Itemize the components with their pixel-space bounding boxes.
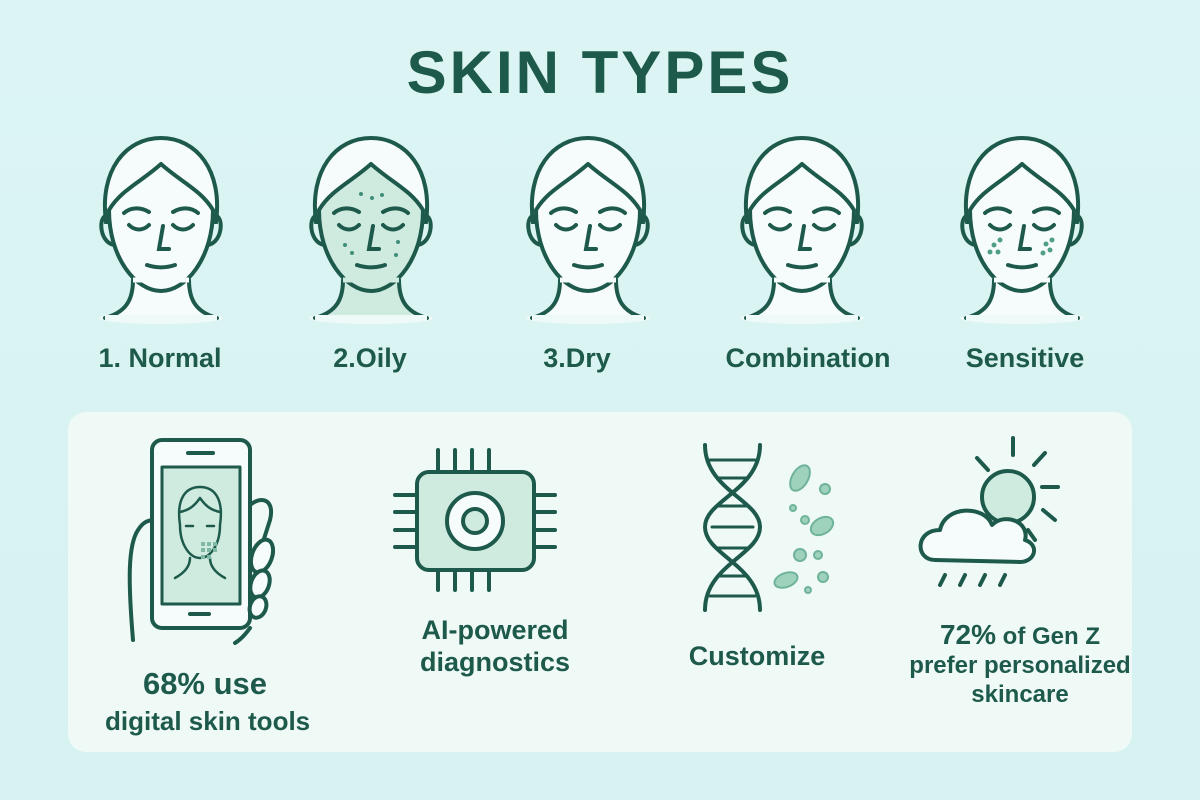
text: 68% stat: 68% use xyxy=(143,666,267,701)
text: 72% stat: skincare xyxy=(971,681,1069,708)
text: customize: Customize xyxy=(689,641,825,671)
text: 72% stat: 72% of Gen Z xyxy=(940,619,1100,650)
face: sensitive xyxy=(960,138,1084,324)
panel: bottom facts xyxy=(68,412,1132,752)
icon: AI chip xyxy=(395,450,555,590)
icon: sun and cloud xyxy=(921,438,1058,585)
text: Combination xyxy=(726,343,890,373)
text: 72% stat xyxy=(909,619,1131,708)
text: Sensitive xyxy=(966,343,1084,373)
text: AI diagnostics: diagnostics xyxy=(420,647,570,677)
faces row xyxy=(99,136,1084,324)
text: 68% stat: digital skin tools xyxy=(105,706,310,736)
face: normal xyxy=(99,138,223,324)
face: combination xyxy=(740,138,864,324)
text: 3.Dry xyxy=(543,343,611,373)
text: 72% stat: prefer personalized xyxy=(909,652,1131,679)
face: dry xyxy=(526,138,650,324)
title: SKIN TYPES xyxy=(407,39,793,106)
face: oily xyxy=(309,138,433,324)
icon: phone xyxy=(130,440,277,643)
text: 2.Oily xyxy=(333,343,407,373)
labels: 1. Normal xyxy=(98,343,222,373)
icon: DNA xyxy=(705,445,836,610)
text: 68% stat xyxy=(105,666,310,736)
text: AI diagnostics xyxy=(420,615,570,677)
text: AI diagnostics: AI-powered xyxy=(421,615,568,645)
